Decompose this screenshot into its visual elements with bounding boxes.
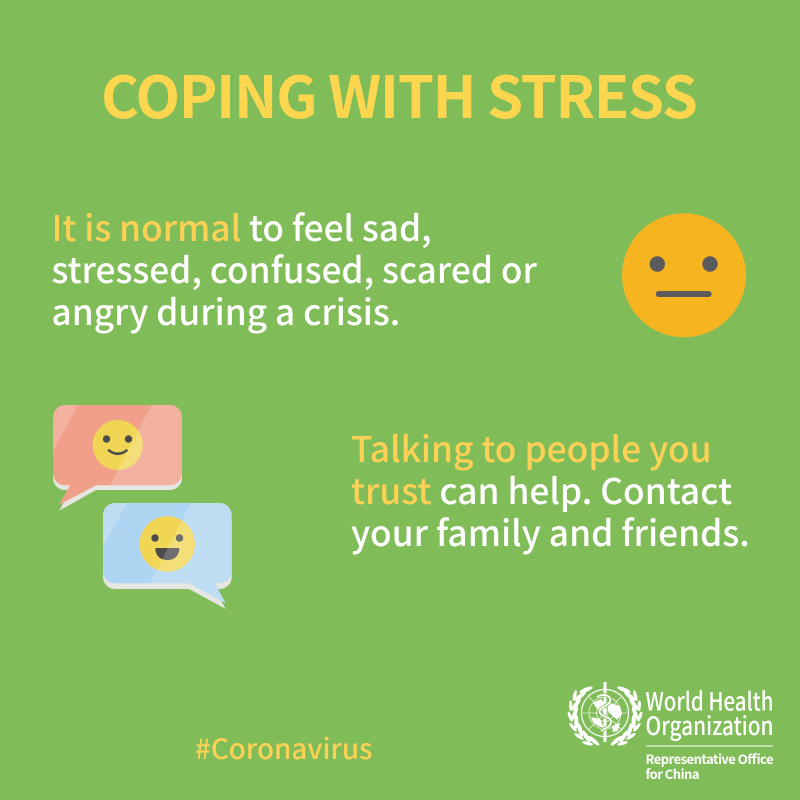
title: COPING WITH STRESS [101, 51, 698, 135]
text block: talking to people: Talking to people you [351, 422, 712, 473]
WHO wordmark [646, 683, 774, 783]
icon: WHO emblem [567, 682, 643, 747]
logo: World Health Organization [567, 682, 774, 783]
hashtag: #Coronavirus [195, 728, 372, 768]
text block: talking to people [351, 422, 750, 557]
WHO wordmark: for China [646, 764, 700, 783]
icon: chat bubbles [53, 405, 232, 609]
text block: it is normal [52, 201, 538, 336]
WHO wordmark: World Health [646, 683, 774, 719]
text block: it is normal: It is normal to feel sad, [52, 201, 432, 252]
text block: talking to people: trust can help. Contact [351, 464, 732, 515]
text block: talking to people: your family and friends. [351, 506, 750, 557]
WHO wordmark: Organization [646, 707, 774, 743]
WHO wordmark: Representative Office [646, 749, 774, 768]
icon: neutral face [622, 213, 746, 337]
text block: it is normal: angry during a crisis. [52, 285, 400, 336]
laurel left [567, 685, 600, 747]
laurel right [610, 685, 643, 747]
pink speech bubble [53, 405, 182, 511]
blue speech bubble [103, 503, 232, 609]
text block: it is normal: stressed, confused, scared or [52, 243, 538, 294]
